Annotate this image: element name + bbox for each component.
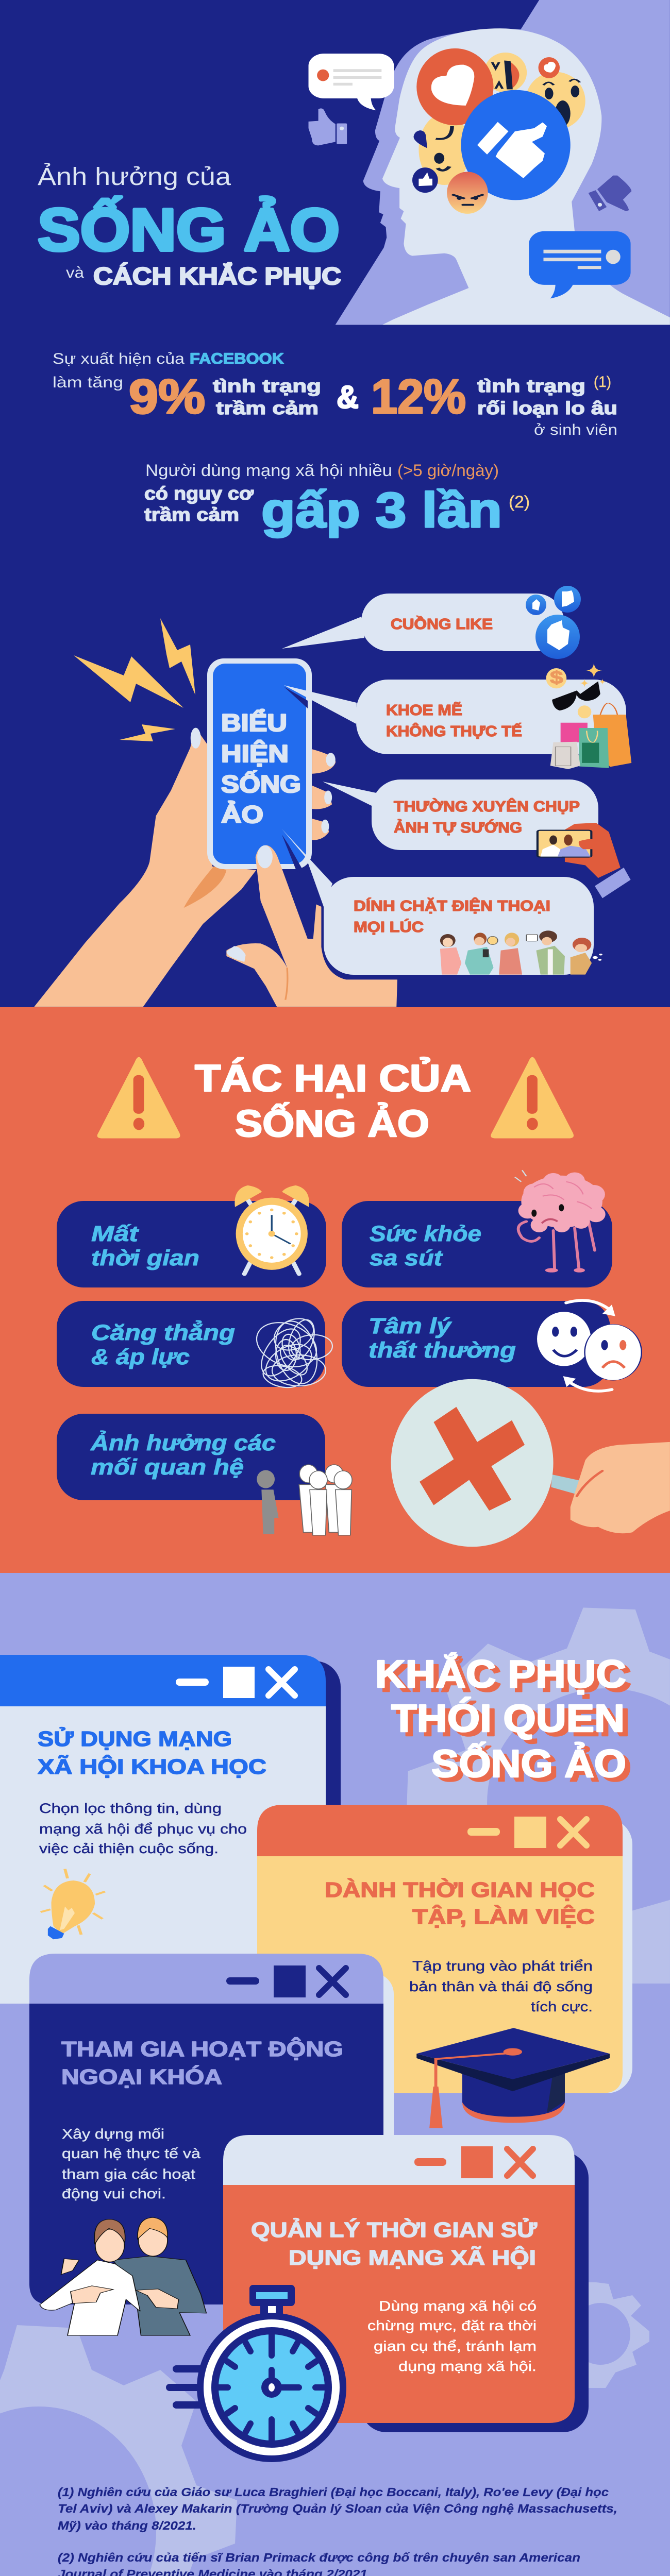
heading: tác hại của sống ảo: SỐNG ẢO (235, 1103, 429, 1145)
heading: khắc phục thói quen sống ảo: THÓI QUEN (396, 1701, 630, 1744)
icon: smiling emoji (413, 113, 470, 185)
panel: ảnh hưởng các mối quan hệ (57, 1414, 325, 1500)
icon: lightning bolts (74, 618, 195, 741)
panel: mất thời gian: thời gian (91, 1246, 199, 1270)
callout: cuồng like (282, 594, 564, 651)
panel: tham gia hoạt động ngoại khóa: THAM GIA HOẠT ĐỘNG (61, 2037, 343, 2061)
statistic: facebook depression and anxiety: (1) (594, 374, 611, 391)
icon: two friends pointing (40, 2217, 206, 2335)
panel: dành thời gian học tập, làm việc: bản thân và thái độ sống (409, 1979, 593, 1994)
panel: dành thời gian học tập, làm việc: tích cực. (531, 1999, 593, 2014)
heading: tác hại của sống ảo: TÁC HẠI CỦA (195, 1058, 471, 1099)
callout: thường xuyên chụp ảnh tự sướng: ẢNH TỰ SƯỚNG (394, 819, 522, 836)
callout: khoe mẽ (284, 680, 626, 754)
statistic: facebook depression and anxiety: FACEBOOK (190, 350, 284, 367)
gear background bottom left (0, 2325, 237, 2576)
panel: tham gia hoạt động ngoại khóa (29, 1954, 394, 2304)
statistic: facebook depression and anxiety: 12% (371, 369, 466, 423)
panel: sức khỏe sa sút (342, 1201, 612, 1287)
heading: khắc phục thói quen sống ảo: KHẮC PHỤC (380, 1656, 631, 1700)
title: và (66, 264, 84, 281)
callout: thường xuyên chụp ảnh tự sướng (323, 779, 598, 850)
icon: white chat bubble (309, 54, 394, 110)
panel: tham gia hoạt động ngoại khóa: quan hệ thực tế và (62, 2146, 201, 2161)
panel: sử dụng mạng xã hội khoa học: SỬ DỤNG MẠNG (38, 1727, 232, 1751)
panel: tham gia hoạt động ngoại khóa: tham gia các hoạt (62, 2166, 196, 2182)
title: Ảnh hưởng của (38, 162, 231, 191)
heading: biểu hiện sống ảo: HIỆN (221, 740, 289, 767)
icon: hand taking selfie (538, 823, 631, 898)
statistic: facebook depression and anxiety: & (337, 380, 359, 415)
icon: big like reaction (461, 90, 571, 200)
callout: dính chặt điện thoại mọi lúc: DÍNH CHẶT ĐIỆN THOẠI (354, 897, 550, 914)
icon: warning triangle right (491, 1057, 574, 1139)
statistic: heavy social network users: gấp 3 lần (261, 483, 502, 538)
citations: Tel Aviv) và Alexey Makarin (Trường Quản lý Sloan của Viện Công nghệ Massachusetts, (58, 2502, 617, 2515)
icon: blue chat bubble (529, 231, 631, 298)
icon: people using phones (440, 930, 602, 975)
title (38, 162, 341, 290)
statistic: facebook depression and anxiety: trầm cảm (216, 398, 319, 418)
heading: khắc phục thói quen sống ảo: SỐNG ẢO (437, 1746, 631, 1789)
heading: khắc phục thói quen sống ảo: THÓI QUEN (391, 1697, 625, 1740)
panel: sử dụng mạng xã hội khoa học: XÃ HỘI KHOA HỌC (38, 1755, 266, 1778)
icon: shopping bags, sunglasses, coins: $ (550, 667, 563, 688)
phone (207, 658, 312, 869)
statistic: heavy social network users: có nguy cơ (144, 483, 254, 504)
panel: tâm lý thất thường: thất thường (368, 1338, 516, 1363)
panel: mất thời gian: Mất (91, 1222, 139, 1246)
panel: dành thời gian học tập, làm việc: TẬP, LÀM VIỆC (412, 1905, 595, 1928)
panel: sử dụng mạng xã hội khoa học: Chọn lọc thông tin, dùng (39, 1801, 222, 1816)
icon: isolated person and group (257, 1465, 352, 1535)
heading: biểu hiện sống ảo: ẢO (221, 801, 263, 828)
statistic: heavy social network users: (2) (509, 493, 530, 511)
panel: dành thời gian học tập, làm việc: DÀNH THỜI GIAN HỌC (325, 1878, 595, 1902)
panel: tâm lý thất thường (342, 1301, 610, 1387)
callout: dính chặt điện thoại mọi lúc (282, 829, 594, 975)
callout: cuồng like: CUỒNG LIKE (391, 615, 493, 633)
statistic: facebook depression and anxiety: rối loạn lo âu (477, 398, 617, 418)
panel: sử dụng mạng xã hội khoa học: việc cải thiện cuộc sống. (39, 1841, 219, 1856)
window controls (176, 1667, 295, 1698)
statistic: facebook depression and anxiety: 9% (129, 369, 205, 423)
panel: dành thời gian học tập, làm việc: Tập trung vào phát triển (412, 1958, 593, 1974)
icon: wow emoji (526, 72, 585, 130)
window controls (414, 2146, 533, 2178)
statistic: facebook depression and anxiety: ở sinh viên (534, 421, 617, 438)
panel: quản lý thời gian sử dụng mạng xã hội: DỤNG MẠNG XÃ HỘI (289, 2246, 536, 2269)
heading: biểu hiện sống ảo: SỐNG (221, 770, 301, 798)
citations (58, 2485, 617, 2576)
statistic: facebook depression and anxiety: làm tăng (53, 374, 123, 391)
panel: sử dụng mạng xã hội khoa học (0, 1655, 341, 2004)
statistic: facebook depression and anxiety: tình trạng (477, 376, 585, 396)
panel: căng thẳng & áp lực: Căng thẳng (91, 1320, 235, 1345)
panel: ảnh hưởng các mối quan hệ: Ảnh hưởng các (90, 1430, 276, 1455)
heading: khắc phục thói quen sống ảo: KHẮC PHỤC (375, 1652, 626, 1696)
hand: fingers over callout (191, 728, 397, 1007)
icon: graduation cap (416, 2028, 610, 2128)
panel: quản lý thời gian sử dụng mạng xã hội: chừng mực, đặt ra thời (367, 2318, 537, 2333)
callout: dính chặt điện thoại mọi lúc: MỌI LÚC (354, 918, 424, 936)
panel: tâm lý thất thường: Tâm lý (368, 1314, 452, 1338)
heading: khắc phục thói quen sống ảo: SỐNG ẢO (431, 1742, 626, 1785)
statistic: facebook depression and anxiety (53, 350, 617, 438)
hand behind phone (34, 728, 336, 1007)
panel: sức khỏe sa sút: sa sút (370, 1246, 443, 1270)
statistic: facebook depression and anxiety: Sự xuất hiện của (53, 350, 185, 367)
icon: shopping bags, sunglasses, coins (546, 662, 631, 769)
statistic: heavy social network users: trầm cảm (144, 504, 239, 525)
icon: alarm clock (234, 1185, 309, 1274)
icon: like reactions (526, 586, 581, 659)
callout: thường xuyên chụp ảnh tự sướng: THƯỜNG XUYÊN CHỤP (394, 798, 580, 815)
gear background small right (571, 2282, 649, 2388)
icon: tangled scribble (250, 1313, 333, 1391)
panel: sử dụng mạng xã hội khoa học: mạng xã hội để phục vụ cho (39, 1821, 247, 1837)
icon: thumbs up (309, 108, 347, 145)
icon: warning triangle left (97, 1057, 180, 1139)
panel: quản lý thời gian sử dụng mạng xã hội: gian cụ thể, tránh lạm (374, 2338, 537, 2354)
icon: angry emoji (447, 172, 488, 214)
panel: tham gia hoạt động ngoại khóa: NGOẠI KHÓA (61, 2065, 222, 2089)
citations: Mỹ) vào tháng 8/2021. (58, 2519, 196, 2532)
statistic: heavy social network users: (>5 giờ/ngày) (397, 461, 499, 480)
hero illustration: head with reactions (309, 0, 670, 325)
title: CÁCH KHẮC PHỤC (93, 262, 341, 290)
panel: tham gia hoạt động ngoại khóa: Xây dựng mối (62, 2126, 164, 2142)
heading: biểu hiện sống ảo: BIỂU (221, 709, 287, 736)
panel: sức khỏe sa sút: Sức khỏe (370, 1222, 481, 1246)
statistic: heavy social network users: Người dùng mạng xã hội nhiều (145, 461, 392, 480)
icon: light bulb (41, 1869, 105, 1939)
panel: quản lý thời gian sử dụng mạng xã hội: QUẢN LÝ THỜI GIAN SỬ (251, 2218, 538, 2242)
panel: căng thẳng & áp lực (57, 1301, 325, 1387)
icon: mood swing smileys (537, 1300, 642, 1391)
title: SỐNG ẢO (38, 196, 340, 263)
panel: quản lý thời gian sử dụng mạng xã hội: dụng mạng xã hội. (398, 2359, 537, 2374)
gear background top right (407, 1607, 670, 1984)
panel: căng thẳng & áp lực: & áp lực (91, 1345, 190, 1369)
icon: small heart badge (539, 57, 560, 78)
heading: tác hại của sống ảo (195, 1058, 471, 1145)
statistic: facebook depression and anxiety: tình trạng (213, 376, 321, 396)
panel: tham gia hoạt động ngoại khóa: động vui chơi. (62, 2186, 166, 2201)
statistic: heavy social network users (144, 461, 530, 538)
icon: stopwatch (170, 2285, 346, 2462)
panel: dành thời gian học tập, làm việc (257, 1805, 632, 2093)
citations: (2) Nghiên cứu của tiến sĩ Brian Primack được công bố trên chuyên san American (58, 2551, 580, 2564)
icon: sad brain (515, 1170, 606, 1273)
icon: small like badge (412, 167, 438, 193)
icon: magnifier with red cross (391, 1379, 670, 1547)
panel: ảnh hưởng các mối quan hệ: mối quan hệ (91, 1455, 244, 1480)
icon: crying laugh emoji (484, 53, 527, 93)
panel: quản lý thời gian sử dụng mạng xã hội: Dùng mạng xã hội có (379, 2298, 537, 2314)
heading: khắc phục thói quen sống ảo (375, 1652, 631, 1789)
window controls (226, 1965, 346, 1997)
icon: thumbs down (589, 176, 631, 211)
panel: mất thời gian (57, 1201, 326, 1287)
window controls (467, 1817, 587, 1848)
callout: khoe mẽ: KHÔNG THỰC TẾ (386, 722, 522, 740)
heading: biểu hiện sống ảo (221, 709, 301, 828)
callout: khoe mẽ: KHOE MẼ (386, 701, 462, 719)
citations: (1) Nghiên cứu của Giáo sư Luca Braghieri (Đại học Boccani, Italy), Ro'ee Levy (Đại học (58, 2485, 609, 2499)
panel: quản lý thời gian sử dụng mạng xã hội (223, 2135, 589, 2432)
icon: heart reaction (416, 48, 493, 125)
